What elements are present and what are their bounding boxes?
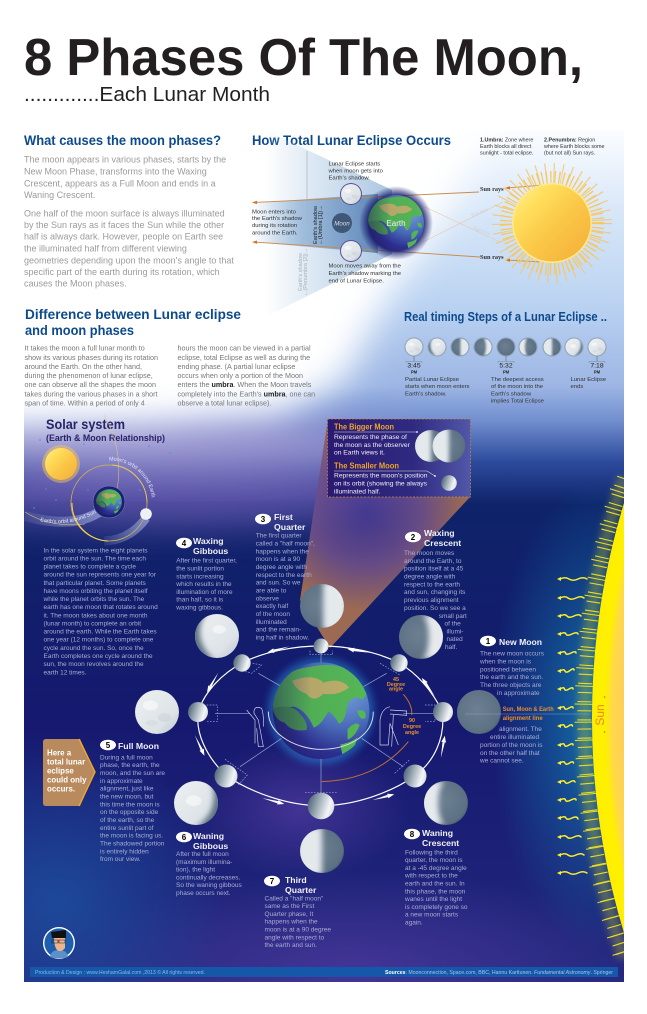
text: what causes the moon phases: causes the Moon phases. bbox=[24, 279, 127, 289]
text: difference between eclipse and phases: observe a total lunar eclipse). bbox=[178, 398, 271, 407]
text: what causes the moon phases: the illuminated half from different viewing bbox=[24, 244, 187, 254]
moon phase 5: full moon: alignment, just like bbox=[100, 786, 154, 793]
solar system text: sun, the moon revolves around the bbox=[44, 661, 144, 668]
legend: smaller moon bbox=[334, 461, 457, 495]
moon phase 3: first quarter: illuminated bbox=[256, 619, 287, 626]
moon phase 5: full moon: is entirely hidden bbox=[100, 848, 149, 855]
diagram: total lunar eclipse: end of Lunar Eclipse. bbox=[328, 278, 384, 284]
solar system text: Earth completes one cycle around the bbox=[44, 653, 153, 660]
moons in eclipse bbox=[332, 183, 362, 262]
legend: smaller moon: on its orbit (showing the always bbox=[334, 481, 428, 488]
moon phase 6: waning gibbous: So the waning gibbous bbox=[176, 882, 243, 889]
moon phase 8: waning crescent: earth and the sun. In bbox=[405, 880, 465, 888]
moon phase 1: new moon: The new moon occurs bbox=[480, 651, 545, 658]
moon phase 7: third quarter: moon is at a 90 degree bbox=[264, 926, 331, 934]
earth with halo bbox=[359, 186, 433, 260]
moon phase 1: new moon: on the other half that bbox=[480, 750, 540, 757]
moon sequence bbox=[404, 337, 607, 357]
text: difference between eclipse and phases: one can observe all the shapes the moon bbox=[24, 380, 156, 389]
moons in eclipse: Moon bbox=[334, 220, 350, 228]
moon phase 7: third quarter: angle with respect to bbox=[264, 934, 325, 941]
moon phase 8: waning crescent: is completely gone so bbox=[405, 904, 468, 911]
heading: solar system: Solar system bbox=[46, 416, 125, 432]
angle labels bbox=[387, 677, 421, 736]
title: 8 Phases Of The Moon, bbox=[24, 29, 583, 87]
moon phase 8: waning crescent: again. bbox=[405, 920, 423, 926]
text: difference between eclipse and phases: hours the moon can be viewed in a partial bbox=[178, 344, 311, 353]
moon phase 4: waxing gibbous: 4 bbox=[182, 539, 187, 548]
credit: Production & Design : www.HeshamGalal.com ,2013 © All rights reserved. bbox=[35, 969, 205, 976]
callout: total lunar eclipse note: Here a bbox=[47, 749, 72, 758]
moon phase 8: waning crescent: 8 bbox=[410, 830, 415, 839]
moon phase 2: waxing crescent: small part bbox=[439, 613, 467, 620]
moon phase 7: third quarter: same as the First bbox=[264, 903, 315, 910]
solar system text: have moons orbiting the planet itself bbox=[44, 588, 148, 595]
text: difference between eclipse and phases: occurs when only a portion of the Moon bbox=[178, 371, 303, 380]
moon phase 2: waxing crescent: degree angle with bbox=[404, 574, 456, 580]
legend: penumbra: 2.Penumbra: Region bbox=[544, 138, 595, 144]
diagram: total lunar eclipse: Earth's shadow bbox=[298, 252, 304, 291]
moon phase 7: third quarter: the earth and sun. bbox=[264, 942, 317, 949]
text: what causes the moon phases: New Moon Phase, transforms into the Waxing bbox=[24, 166, 207, 176]
moon phase 3: first quarter: observe bbox=[256, 595, 279, 602]
angle labels: Degree bbox=[403, 724, 421, 730]
moon phase 5: full moon: entire sunlit part of bbox=[100, 825, 154, 832]
moon phase 1: new moon: positioned between bbox=[480, 666, 536, 673]
moon phase 1: new moon: Sun, Moon & Earth bbox=[503, 706, 554, 713]
earth ring bbox=[268, 712, 373, 749]
moon phase 5: full moon: moon, and the sun are bbox=[100, 770, 165, 777]
solar system text: while the planet orbits the sun. The bbox=[42, 596, 145, 603]
callout: total lunar eclipse note: occurs. bbox=[47, 785, 75, 794]
diagram: total lunar eclipse: ←(Penumbra [2])→ bbox=[303, 248, 309, 296]
time labels: PM bbox=[594, 370, 601, 374]
moon phase 4: waxing gibbous: waxing gibbous. bbox=[175, 604, 223, 612]
legend: umbra: Earth blocks all direct bbox=[480, 144, 532, 150]
text: what causes the moon phases: by the Sun rays as it faces the Sun while the other bbox=[24, 220, 224, 230]
moon phase 1: new moon: portion of the moon is bbox=[480, 742, 543, 749]
solar system text: planet takes to complete a cycle bbox=[44, 564, 136, 571]
moon phase 2: waxing crescent: The moon moves bbox=[404, 550, 455, 557]
legend: bigger moon: on Earth views it. bbox=[334, 450, 385, 457]
moon phase 5: full moon: the new moon, but bbox=[100, 794, 154, 800]
panel: solar system: Earth's orbit around Sun bbox=[40, 510, 96, 524]
solar system text: cycle around the sun. So, once the bbox=[44, 645, 144, 652]
text: what causes the moon phases: The moon appears in various phases, starts by the bbox=[24, 155, 226, 165]
legend: bigger moon: The Bigger Moon bbox=[334, 421, 394, 431]
step captions: implies Total Eclipse bbox=[491, 398, 545, 404]
step captions: Partial Lunar Eclipse bbox=[405, 377, 460, 383]
heading: difference: and moon phases bbox=[25, 322, 134, 338]
text: what causes the moon phases: geometries depending upon the moon's angle to that bbox=[24, 255, 234, 265]
moon phase 3: first quarter: respect to the earth bbox=[256, 572, 312, 579]
diagram: total lunar eclipse: Moon moves away from the bbox=[328, 264, 402, 270]
angle labels: angle bbox=[389, 686, 403, 692]
time labels bbox=[406, 356, 605, 374]
text: difference between eclipse and phases: around the Earth. On the other hand, bbox=[24, 362, 142, 371]
panel: solar system bbox=[24, 414, 171, 676]
solar system text: that particular planet. Some planets bbox=[44, 580, 147, 587]
moon phase 2: waxing crescent: around the Earth, to bbox=[404, 558, 462, 565]
moon phase 3: first quarter: are able to bbox=[256, 588, 287, 594]
moon phase 3: first quarter: called a "half moon", bbox=[256, 540, 315, 548]
moon phase 3: first quarter: and sun. So we bbox=[256, 580, 301, 587]
sun label bbox=[596, 696, 606, 733]
moon phase 6: waning gibbous: tion), the light bbox=[176, 867, 215, 874]
moon phase 4: waxing gibbous bbox=[175, 536, 239, 660]
moon phase 2: waxing crescent: and sun, changing its bbox=[404, 589, 466, 596]
diagram: total lunar eclipse: Sun rays bbox=[480, 186, 504, 193]
moon phase 3: first quarter bbox=[255, 512, 347, 642]
text: difference between eclipse and phases: eclipse, total Eclipse as well as during the bbox=[178, 353, 310, 362]
moon phase 8: waning crescent: quarter, the moon is bbox=[405, 857, 463, 864]
moon phase 8: waning crescent: Following the third bbox=[405, 849, 458, 856]
moon phase 1: new moon: when the moon is bbox=[479, 658, 532, 666]
time labels: 3:45 bbox=[407, 362, 421, 370]
text: what causes the moon phases bbox=[24, 132, 234, 289]
step captions: ends bbox=[570, 384, 583, 390]
diagram: total lunar eclipse: Earth's shadow. bbox=[328, 176, 370, 182]
legend: umbra bbox=[480, 138, 533, 156]
callout: total lunar eclipse note: total lunar bbox=[47, 758, 85, 767]
moon phase 5: full moon: this time the moon is bbox=[100, 801, 160, 808]
moon phase 7: third quarter: happens when the bbox=[264, 919, 318, 926]
moon phase 8: waning crescent: wanes until the light bbox=[404, 896, 462, 903]
moon phase 4: waxing gibbous: starts increasing bbox=[176, 573, 224, 580]
diagram: moon orbit around earth bbox=[188, 638, 453, 819]
legend: umbra: 1.Umbra: Zone where bbox=[480, 138, 533, 144]
step captions: starts when moon enters bbox=[405, 384, 470, 390]
legend: bigger moon bbox=[334, 421, 466, 464]
moon phase 3: first quarter: First bbox=[274, 512, 293, 522]
solar system text: around the earth. While the Earth takes bbox=[44, 629, 157, 636]
moon phase 6: waning gibbous: Gibbous bbox=[193, 841, 228, 851]
moon phase 1: new moon: alignment. The bbox=[499, 726, 542, 733]
moon phase 3: first quarter: exactly half bbox=[256, 603, 288, 610]
text: difference between eclipse and phases: ending phase. (A partial lunar eclipse bbox=[178, 362, 295, 371]
step captions: Earth's shadow. bbox=[405, 391, 447, 397]
observer left bbox=[247, 707, 263, 747]
heading: eclipse: How Total Lunar Eclipse Occurs bbox=[252, 132, 451, 148]
moon phase 2: waxing crescent: position itself at a 45 bbox=[404, 566, 464, 573]
solar system text: earth 12 times. bbox=[44, 669, 87, 676]
legend: smaller moon: illuminated half. bbox=[334, 488, 381, 495]
moon phase 5: full moon: Full Moon bbox=[118, 741, 159, 751]
moon phase 3: first quarter: degree angle with bbox=[256, 564, 307, 571]
callout: total lunar eclipse note: could only bbox=[47, 776, 87, 785]
footer bar bbox=[30, 967, 618, 977]
moon phase 1: new moon: alignment line bbox=[503, 715, 543, 722]
solar system text: around the sun represents one year for bbox=[44, 572, 157, 579]
moon phase 1: new moon: entire illuminated bbox=[490, 734, 540, 741]
text: what causes the moon phases: One half of the moon surface is always illuminated bbox=[24, 208, 225, 218]
moon phase 3: first quarter: Quarter bbox=[274, 522, 306, 532]
diagram: total lunar eclipse: ←(Umbra [1])→ bbox=[318, 205, 324, 245]
callout: moon legend bbox=[328, 419, 470, 497]
solar system text: (lunar month) to complete an orbit bbox=[44, 620, 141, 628]
central earth bbox=[273, 662, 369, 759]
moon phase 7: third quarter: Called a "half moon" bbox=[264, 895, 324, 902]
panel: real timing steps bbox=[404, 310, 607, 404]
legend: penumbra: where Earth blocks some bbox=[543, 144, 605, 150]
moon phase 6: waning gibbous bbox=[174, 779, 243, 897]
moon phase 3: first quarter: and the remain- bbox=[256, 627, 301, 634]
text: difference between eclipse and phases: show its various phases during its rotation bbox=[24, 353, 158, 362]
text: what causes the moon phases: specific part of the earth during its rotation, which bbox=[24, 267, 220, 277]
moon phase 4: waxing gibbous: illumination of more bbox=[176, 589, 233, 596]
moon phase 3: first quarter: The first quarter bbox=[256, 533, 302, 540]
moon phase 1: new moon: in approximate bbox=[497, 690, 540, 697]
diagram: total lunar eclipse: when moon gets into bbox=[328, 168, 384, 174]
moon phase 5: full moon: on the opposite side bbox=[100, 809, 159, 816]
legend: umbra: sunlight - total eclipse. bbox=[480, 150, 533, 156]
text: difference between eclipse and phases: during the phenomenon of lunar eclipse, bbox=[24, 371, 153, 380]
text: difference between eclipse and phases: enters the umbra. When the Moon travels bbox=[178, 380, 312, 389]
diagram: total lunar eclipse: Sun rays bbox=[480, 254, 504, 261]
solar system text: it. The moon takes about one month bbox=[44, 612, 148, 619]
orbit moons bbox=[188, 638, 453, 819]
solar system text: one year (12 months) to complete one bbox=[44, 637, 154, 644]
time labels: PM bbox=[503, 370, 510, 374]
moon phase 5: full moon: of the earth, so the bbox=[100, 817, 155, 824]
moon phase 5: full moon: phase, the earth, the bbox=[100, 762, 160, 769]
moon phase 4: waxing gibbous: than half, so it is bbox=[176, 597, 224, 604]
text: difference between eclipse and phases: span of time. Within a period of only 4 bbox=[24, 398, 145, 407]
moon phase 2: waxing crescent: position. So we see a bbox=[404, 605, 466, 612]
moon phase 7: third quarter: Third bbox=[285, 875, 307, 885]
subtitle: .............Each Lunar Month bbox=[24, 84, 270, 106]
moon phase 2: waxing crescent: of the bbox=[444, 621, 461, 628]
moon phase 4: waxing gibbous: After the first quarter, bbox=[176, 558, 237, 565]
moon phase 2: waxing crescent: Crescent bbox=[424, 538, 461, 548]
step captions: Earth's shadow bbox=[491, 391, 532, 397]
angle labels: 45 bbox=[393, 677, 399, 683]
legend: smaller moon: The Smaller Moon bbox=[334, 461, 399, 471]
angle labels: angle bbox=[405, 730, 419, 736]
heading: solar system: (Earth & Moon Relationship) bbox=[46, 432, 165, 443]
angle labels: Degree bbox=[387, 682, 405, 688]
sources: Sources: Moonconnection, Space.com, BBC, Hannu Karttunen. Fundamental Astronomy. Springer bbox=[385, 970, 613, 976]
sun: large edge bbox=[584, 478, 624, 958]
moon phase 2: waxing crescent: respect to the earth bbox=[404, 581, 460, 588]
diagram: total lunar eclipse: around the Earth. bbox=[252, 230, 298, 236]
moon phase 6: waning gibbous: 6 bbox=[182, 833, 187, 842]
moon phase 3: first quarter: of the moon bbox=[256, 611, 290, 618]
moon phase 8: waning crescent: with respect to the bbox=[404, 873, 458, 880]
beam from callout to first quarter moon bbox=[300, 425, 470, 648]
moon phase 3: first quarter: 3 bbox=[261, 515, 266, 524]
step captions: Lunar Eclipse bbox=[570, 377, 607, 383]
moon phase 7: third quarter: Quarter phase, It bbox=[264, 911, 313, 918]
sun bbox=[503, 174, 601, 272]
heading: difference: Difference between Lunar eclipse bbox=[25, 306, 241, 322]
text: what causes the moon phases: half is always dark. However, people on Earth see bbox=[24, 232, 223, 242]
legend: bigger moon: Represents the phase of bbox=[334, 434, 407, 441]
moon phase 8: waning crescent: at a -45 degree angle bbox=[405, 865, 467, 872]
solar rays bbox=[560, 578, 587, 874]
moon phase 5: full moon: in approximate bbox=[100, 778, 143, 785]
moon phase 1: new moon: 1 bbox=[486, 637, 491, 646]
observer right bbox=[380, 707, 407, 747]
spokes bbox=[207, 651, 435, 797]
icon: designer portrait bbox=[43, 927, 75, 959]
small earth bbox=[93, 486, 125, 518]
moon phase 6: waning gibbous: After the full moon bbox=[176, 851, 229, 858]
diagram: total lunar eclipse: the Earth's shadow bbox=[252, 216, 303, 222]
moon phase 8: waning crescent: Waning bbox=[422, 828, 453, 838]
solar system text: earth has one moon that rotates around bbox=[44, 604, 158, 611]
moon phase 8: waning crescent bbox=[404, 781, 468, 926]
moon phase 7: third quarter bbox=[264, 827, 344, 949]
small sun bbox=[42, 445, 80, 483]
diagram: total lunar eclipse: Moon enters into bbox=[252, 209, 297, 215]
time labels: 5:32 bbox=[499, 362, 513, 370]
moon phase 7: third quarter: 7 bbox=[270, 877, 275, 886]
legend: bigger moon: the moon as the observer bbox=[334, 442, 411, 449]
moon phase 5: full moon: from our view. bbox=[100, 856, 141, 863]
time labels: 7:18 bbox=[590, 362, 604, 370]
moon phase 2: waxing crescent: Waxing bbox=[424, 528, 455, 538]
small moon bbox=[140, 508, 152, 520]
solar system text: orbit around the sun. The time each bbox=[44, 555, 146, 562]
earth with halo: Earth bbox=[386, 219, 406, 228]
moon phase 2: waxing crescent: nated bbox=[446, 636, 463, 643]
step captions: The deepest access bbox=[491, 377, 544, 383]
diagram: total lunar eclipse: Earth's shadow marking the bbox=[328, 271, 402, 277]
moon phase 4: waxing gibbous: which results in the bbox=[175, 581, 232, 588]
moon phase 1: new moon: New Moon bbox=[499, 637, 542, 647]
legend: smaller moon: Represents the moon's position bbox=[334, 473, 428, 480]
panel: solar system: Moon's orbit around Earth bbox=[109, 456, 156, 498]
moon phase 2: waxing crescent: 2 bbox=[411, 533, 416, 542]
moon phase 2: waxing crescent: half. bbox=[445, 644, 457, 651]
heading: what causes: What causes the moon phases? bbox=[24, 132, 221, 148]
solar system text: In the solar system the eight planets bbox=[44, 547, 148, 554]
step captions: of the moon into the bbox=[491, 384, 544, 390]
moon phase 3: first quarter: moon is at a 90 bbox=[256, 556, 301, 563]
time labels: PM bbox=[411, 370, 418, 374]
moon phase 6: waning gibbous: phase occurs next. bbox=[176, 890, 231, 897]
diagram: total lunar eclipse: Lunar Eclipse starts bbox=[328, 161, 380, 167]
moon phase 3: first quarter: happens when the bbox=[256, 548, 309, 555]
moon phase 4: waxing gibbous: the sunlit portion bbox=[176, 566, 224, 572]
text: difference between eclipse and phases: completely into the Earth's umbra, one can bbox=[178, 389, 315, 398]
moon phase 8: waning crescent: this phase, the moon bbox=[405, 888, 466, 895]
sun label: Sun bbox=[593, 704, 607, 726]
legend: penumbra: (but not all) Sun rays. bbox=[544, 150, 595, 156]
orbit bbox=[198, 646, 443, 806]
angle labels: 90 bbox=[409, 718, 415, 724]
moon phase 5: full moon: The shadowed portion bbox=[100, 840, 165, 847]
moon phase 7: third quarter: Quarter bbox=[285, 885, 317, 895]
text: difference between eclipse and phases: takes during the various phases in a short bbox=[24, 389, 158, 398]
text: what causes the moon phases: Crescent, appears as a Full Moon and ends in a bbox=[24, 178, 216, 188]
moon phase 1: new moon: The three objects are bbox=[480, 682, 542, 689]
moon phase 1: new moon: we cannot see. bbox=[479, 758, 524, 765]
moon phase 1: new moon: the earth and the sun. bbox=[480, 674, 543, 681]
moon phase 2: waxing crescent: illumi- bbox=[446, 628, 463, 635]
diagram: total lunar eclipse: Sun rays bbox=[472, 226, 490, 237]
step captions bbox=[405, 377, 607, 404]
diagram: total lunar eclipse bbox=[252, 130, 605, 317]
diagram: total lunar eclipse: during its rotation bbox=[252, 223, 297, 229]
moon phase 2: waxing crescent: previous alignment bbox=[404, 597, 459, 604]
moon phase 6: waning gibbous: (maximum illumina- bbox=[176, 859, 232, 866]
moon phase 6: waning gibbous: Waning bbox=[193, 831, 224, 841]
moon phase 4: waxing gibbous: Gibbous bbox=[193, 546, 228, 556]
diagram: total lunar eclipse: Earth's shadow bbox=[313, 205, 319, 244]
text: difference between eclipse and phases: It takes the moon a full lunar month to bbox=[24, 344, 145, 353]
moon phase 5: full moon: 5 bbox=[106, 741, 111, 750]
legend: penumbra bbox=[543, 138, 605, 156]
moon phase 8: waning crescent: Crescent bbox=[422, 838, 459, 848]
callout: total lunar eclipse note: eclipse bbox=[47, 767, 74, 776]
callout: total lunar eclipse note bbox=[43, 739, 95, 806]
moon phase 5: full moon: the moon is facing us. bbox=[100, 833, 163, 840]
moon phase 6: waning gibbous: continually decreases. bbox=[176, 874, 241, 881]
diagram: total lunar eclipse: Sun rays bbox=[471, 208, 489, 219]
moon phase 2: waxing crescent bbox=[399, 528, 467, 659]
solar system text bbox=[42, 547, 158, 676]
heading: solar system bbox=[46, 416, 165, 443]
earth glow bbox=[268, 658, 374, 764]
moon phase 5: full moon bbox=[100, 690, 179, 863]
text: what causes the moon phases: Waning Crescent. bbox=[24, 190, 95, 200]
moon phase 1: new moon bbox=[457, 636, 590, 765]
moon phase 4: waxing gibbous: Waxing bbox=[193, 536, 224, 546]
heading: timing: Real timing Steps of a Lunar Eclipse .. bbox=[404, 310, 607, 324]
text: difference between eclipse and phases bbox=[24, 306, 315, 407]
moon phase 8: waning crescent: a new moon starts bbox=[405, 912, 459, 919]
moon phase 3: first quarter: ing half in shadow. bbox=[256, 634, 309, 642]
moon phase 5: full moon: During a full moon bbox=[100, 754, 153, 761]
heading: difference bbox=[25, 306, 241, 338]
